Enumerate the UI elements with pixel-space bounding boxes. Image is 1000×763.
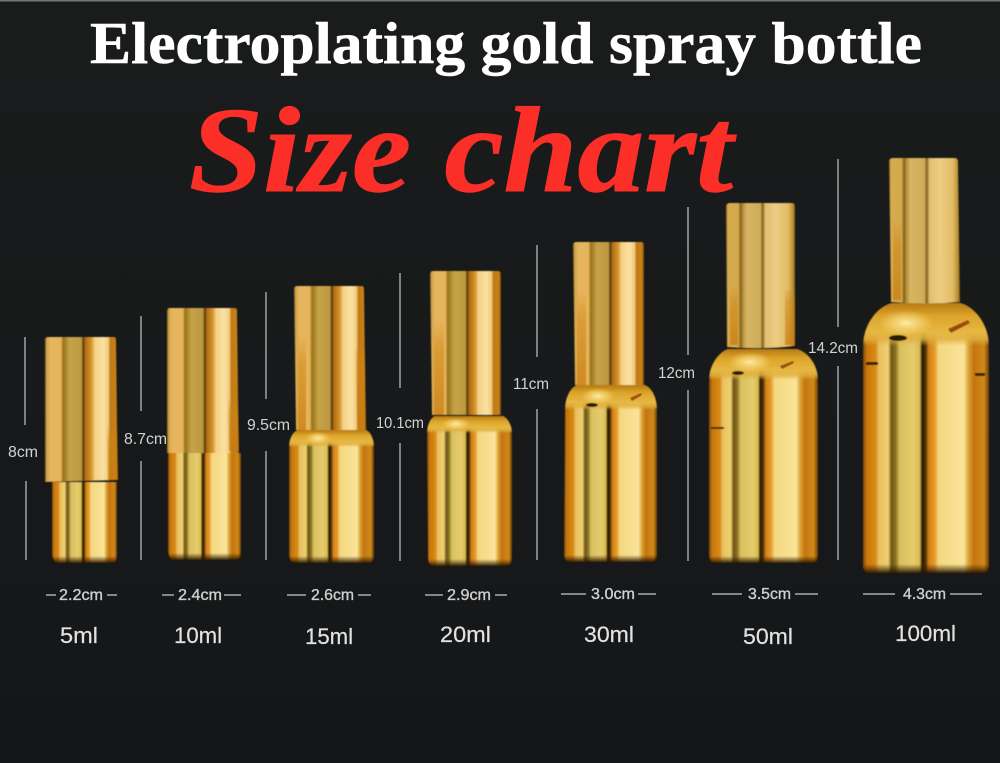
- bottle cap 15ml: [294, 286, 366, 430]
- shoulder streak 50ml: [780, 361, 794, 369]
- bottle: 30ml: [564, 242, 657, 562]
- bottle: 20ml: [427, 271, 512, 566]
- height markers: [8, 159, 858, 561]
- width marker 3.5cm: 3.5cm: [748, 586, 791, 603]
- bottle shoulder 20ml: [427, 416, 512, 433]
- side notches 100ml: [866, 362, 985, 376]
- bottle shoulder 100ml: [863, 303, 989, 346]
- bottle body 10ml: [168, 453, 241, 560]
- width marker 2.4cm: 2.4cm: [178, 587, 222, 604]
- bottle cap 30ml: [573, 242, 644, 385]
- bottle base 10ml: [169, 553, 241, 560]
- side notch 50ml: [711, 427, 724, 429]
- label 10ml: 10ml: [174, 623, 222, 648]
- label 20ml: 20ml: [440, 622, 491, 647]
- cap reflection 15ml: [298, 335, 366, 430]
- width markers: [46, 586, 982, 604]
- width marker 3.5cm: [712, 586, 818, 603]
- shoulder streak 100ml: [948, 320, 970, 333]
- cap reflection 100ml: [893, 220, 901, 300]
- cap reflection 10ml: [228, 397, 239, 451]
- bottle shoulder 30ml: [565, 385, 657, 410]
- width marker 2.6cm: 2.6cm: [311, 587, 354, 604]
- bottle body 100ml: [863, 303, 989, 573]
- bottle base 30ml: [565, 555, 657, 562]
- bottle: 10ml: [167, 308, 241, 560]
- width marker 2.9cm: [425, 587, 507, 604]
- width marker 2.6cm: [287, 587, 371, 604]
- shoulder glow 15ml: [305, 432, 331, 444]
- height marker 12cm: 12cm: [658, 365, 695, 382]
- height marker 8.7cm: 8.7cm: [124, 431, 167, 448]
- bottle cap 100ml: [889, 158, 960, 304]
- bottle shoulder 50ml: [709, 349, 818, 380]
- cap reflection 20ml: [434, 320, 444, 415]
- shoulder glow 50ml: [728, 352, 772, 372]
- shoulder glow 20ml: [442, 418, 470, 430]
- shoulder glow 100ml: [878, 310, 934, 336]
- bottle cap 5ml: [45, 337, 118, 482]
- height marker 14.2cm: 14.2cm: [808, 340, 858, 357]
- shoulder spot 30ml: [586, 403, 598, 407]
- width marker 2.2cm: [46, 587, 117, 604]
- bottle body 50ml: [709, 349, 818, 563]
- height marker 8cm: 8cm: [8, 444, 38, 461]
- volume labels: [60, 621, 956, 649]
- bottle body 20ml: [427, 416, 512, 566]
- bottle base 100ml: [864, 564, 989, 573]
- shoulder spot 100ml: [889, 335, 907, 341]
- title: Electroplating gold spray bottle: [90, 10, 922, 76]
- bottle cap 10ml: [167, 308, 239, 453]
- label 30ml: 30ml: [584, 622, 634, 647]
- width marker 2.4cm: [162, 587, 241, 604]
- label 100ml: 100ml: [895, 621, 956, 646]
- cap reflection 50ml: [730, 285, 795, 345]
- height marker 10.1cm: 10.1cm: [376, 415, 424, 432]
- bottle: 100ml: [863, 158, 989, 573]
- cap reflection 5ml: [107, 425, 118, 480]
- cap reflection 30ml: [577, 290, 586, 385]
- bottle body 30ml: [564, 385, 657, 562]
- bottle cap 50ml: [726, 203, 795, 348]
- height marker 11cm: 11cm: [513, 376, 549, 393]
- width marker 4.3cm: 4.3cm: [903, 586, 946, 603]
- shoulder glow 30ml: [581, 388, 615, 404]
- bottle body 15ml: [289, 430, 374, 563]
- bottle: 50ml: [709, 203, 818, 563]
- bottle body 5ml: [52, 482, 117, 563]
- bottle shoulder 15ml: [289, 430, 374, 447]
- label 50ml: 50ml: [743, 624, 793, 649]
- bottle base 5ml: [53, 556, 117, 563]
- shoulder spot 50ml: [732, 371, 744, 375]
- label 15ml: 15ml: [305, 624, 353, 649]
- subtitle: size chart: Size chart: [189, 83, 736, 218]
- width marker 2.2cm: 2.2cm: [59, 587, 103, 604]
- bottle: 15ml: [289, 286, 374, 563]
- width marker 2.9cm: 2.9cm: [447, 587, 491, 604]
- bottle: 5ml: [45, 337, 118, 563]
- bottle cap 20ml: [430, 271, 501, 415]
- bottle base 20ml: [429, 559, 512, 566]
- bottle base 15ml: [290, 556, 374, 563]
- label 5ml: 5ml: [60, 623, 98, 648]
- shoulder streak 30ml: [630, 393, 642, 401]
- bottle base 50ml: [710, 556, 818, 563]
- width marker 3.0cm: 3.0cm: [591, 586, 635, 603]
- width marker 4.3cm: [863, 586, 982, 603]
- height marker 9.5cm: 9.5cm: [247, 417, 290, 434]
- width marker 3.0cm: [561, 586, 656, 603]
